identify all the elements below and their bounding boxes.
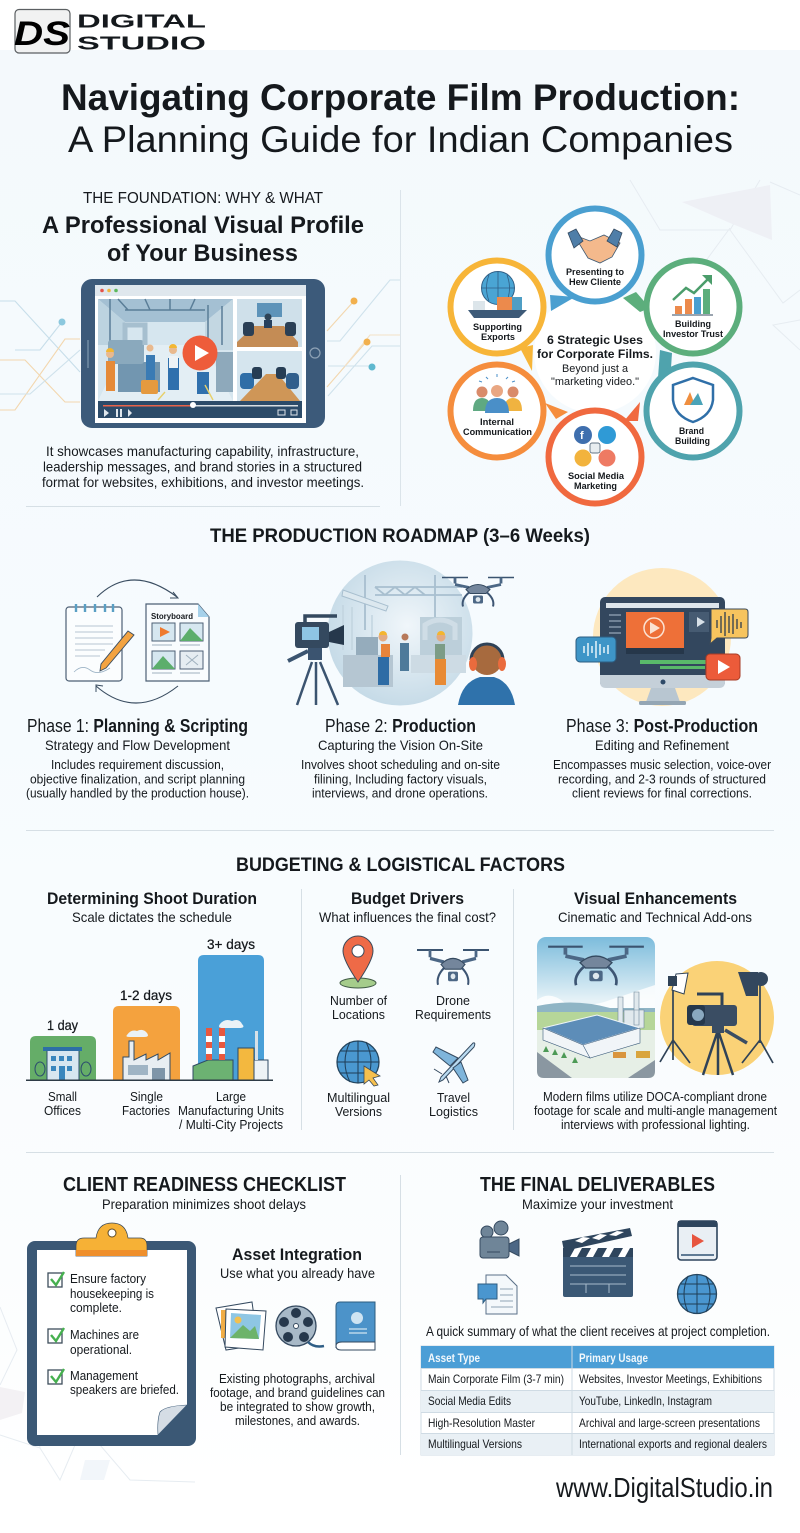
table row 4 — [428, 1437, 767, 1451]
foundation description: It showcases manufacturing capability, infrastructure, — [46, 443, 359, 459]
checklist heading — [63, 1174, 346, 1212]
check item 2 — [48, 1328, 139, 1357]
table row 3 — [428, 1416, 760, 1430]
bar labels — [44, 1090, 284, 1132]
table row 3: Archival and large-screen presentations — [579, 1416, 760, 1430]
icon: video camera — [480, 1221, 519, 1258]
visual enhancements heading: Cinematic and Technical Add-ons — [558, 909, 752, 925]
title: A Planning Guide for Indian Companies — [68, 119, 733, 160]
deliverables heading: THE FINAL DELIVERABLES — [480, 1174, 715, 1196]
shoot duration heading — [47, 889, 257, 925]
phase 2 text: Phase 2: Production — [325, 716, 476, 736]
icon: notebook and storyboard: Storyboard — [151, 612, 193, 621]
person with headset — [458, 644, 515, 705]
icon: production scene — [288, 560, 515, 706]
asset integration: Asset Integration — [232, 1245, 362, 1264]
panel: shoot duration — [26, 889, 284, 1132]
use: presenting to new clients — [548, 208, 642, 302]
use: supporting exports: Supporting — [473, 322, 522, 332]
visual enhancements heading — [558, 889, 752, 925]
icon: notebook and storyboard — [66, 580, 209, 703]
illustration: aerial drone over factory — [537, 937, 655, 1078]
budget drivers heading: Budget Drivers — [351, 889, 464, 908]
asset integration: be integrated to show growth, — [220, 1400, 375, 1414]
circuit lines left of tablet — [0, 301, 80, 410]
checklist heading: Preparation minimizes shoot delays — [102, 1196, 306, 1212]
bar labels: Manufacturing Units — [178, 1104, 284, 1118]
table header: Asset Type — [428, 1351, 480, 1365]
table header: Primary Usage — [579, 1351, 648, 1365]
table header — [428, 1351, 648, 1365]
check item 1 — [48, 1272, 154, 1315]
phase 3 text: client reviews for final corrections. — [572, 786, 752, 800]
table row 2: YouTube, LinkedIn, Instagram — [579, 1394, 712, 1408]
icon: clipboard — [27, 1223, 196, 1446]
table row 1: Main Corporate Film (3-7 min) — [428, 1372, 564, 1386]
panel: visual enhancements — [534, 889, 777, 1132]
use: supporting exports: Exports — [481, 332, 515, 342]
phase 1 text: objective finalization, and script planning — [30, 772, 245, 786]
foundation heading: A Professional Visual Profile — [42, 212, 364, 239]
use: brand building — [646, 364, 740, 458]
use: social media marketing: f — [580, 430, 584, 442]
centre text circle: 6 Strategic Uses — [547, 333, 643, 347]
phase 3 text: Phase 3: Post-Production — [566, 716, 758, 736]
deliverables heading: Maximize your investment — [522, 1196, 673, 1212]
asset integration: Existing photographs, archival — [219, 1372, 375, 1386]
budget drivers heading: What influences the final cost? — [319, 909, 496, 925]
foundation description: format for websites, exhibitions, and investor meetings. — [42, 474, 364, 490]
phase 1 text: Strategy and Flow Development — [45, 737, 230, 753]
panel: phase 1 — [26, 580, 249, 800]
check item 2: Machines are — [70, 1328, 139, 1342]
phase 2 text: Capturing the Vision On-Site — [318, 737, 483, 753]
factory video scene — [98, 299, 233, 401]
visual enhancements description — [534, 1090, 777, 1132]
visual enhancements description: footage for scale and multi-angle management — [534, 1104, 777, 1118]
illustration: camera and lights — [660, 961, 774, 1075]
driver: multilingual — [327, 1041, 390, 1119]
icon: tablet with video — [81, 279, 325, 428]
phase 2 text — [301, 716, 500, 800]
bar labels: Small — [48, 1090, 77, 1104]
foundation description: leadership messages, and brand stories in a structured — [43, 458, 362, 474]
panel: foundation — [0, 190, 400, 490]
visual enhancements heading: Visual Enhancements — [574, 889, 737, 908]
use: building investor trust — [646, 260, 740, 354]
phase 1 text: (usually handled by the production house). — [26, 786, 249, 800]
meeting room top — [237, 299, 302, 347]
asset integration: milestones, and awards. — [235, 1414, 360, 1428]
icon: video player — [678, 1221, 717, 1260]
foundation heading — [42, 190, 364, 267]
driver: travel: Logistics — [429, 1105, 478, 1119]
foundation description — [42, 443, 364, 490]
phase 2 text: filining, Including factory visuals, — [314, 772, 487, 786]
panel: phase 3 — [553, 568, 771, 800]
budget drivers heading — [319, 889, 496, 925]
bar chart: days by scale: 1-2 days — [120, 987, 172, 1003]
table row 4: International exports and regional dealers — [579, 1437, 767, 1451]
bar labels: Large — [216, 1090, 246, 1104]
check item 1: Ensure factory — [70, 1272, 147, 1286]
checklist heading: CLIENT READINESS CHECKLIST — [63, 1174, 346, 1196]
video controls — [98, 401, 302, 418]
circuit lines right of tablet — [327, 280, 400, 396]
use: supporting exports — [450, 260, 544, 354]
check item 3: Management — [70, 1369, 138, 1383]
drone — [442, 578, 514, 606]
driver: locations: Number of — [330, 994, 388, 1008]
visual enhancements description: interviews with professional lighting. — [561, 1118, 750, 1132]
bar labels: Factories — [122, 1104, 170, 1118]
bar labels: / Multi-City Projects — [179, 1118, 283, 1132]
driver: multilingual: Multilingual — [327, 1091, 390, 1105]
driver: travel — [429, 1043, 478, 1119]
use: social media marketing — [548, 410, 642, 504]
table row 4: Multilingual Versions — [428, 1437, 522, 1451]
driver: drone: Requirements — [415, 1008, 491, 1022]
bar labels: Offices — [44, 1104, 81, 1118]
phase 3 text: recording, and 2-3 rounds of structured — [558, 772, 766, 786]
phase 1 text: Includes requirement discussion, — [51, 758, 224, 772]
shoot duration heading: Scale dictates the schedule — [72, 909, 232, 925]
bar chart: days by scale: 3+ days — [207, 936, 255, 952]
foundation heading: THE FOUNDATION: WHY & WHAT — [83, 190, 323, 207]
centre text circle — [520, 291, 672, 421]
deliverables table — [421, 1346, 774, 1455]
deliverables heading — [480, 1174, 715, 1212]
driver: drone — [415, 950, 491, 1022]
use: building investor trust: Investor Trust — [663, 329, 723, 339]
icon: film reel — [276, 1306, 324, 1346]
use: internal communication: Communication — [463, 427, 532, 437]
phase 3 text — [553, 716, 771, 800]
use: building investor trust: Building — [675, 319, 711, 329]
panel: client readiness checklist — [27, 1174, 385, 1446]
asset integration: Use what you already have — [220, 1265, 375, 1281]
table row 2: Social Media Edits — [428, 1394, 511, 1408]
table row 3: High-Resolution Master — [428, 1416, 535, 1430]
film camera on tripod — [288, 616, 344, 705]
phase 3 text: Editing and Refinement — [595, 737, 729, 753]
icon: editing monitor — [576, 568, 748, 706]
table row 2 — [428, 1394, 712, 1408]
use: social media marketing: Social Media — [568, 471, 625, 481]
panel: budget drivers — [319, 889, 496, 1119]
driver: travel: Travel — [437, 1091, 470, 1105]
icon: brand guidelines book — [336, 1302, 375, 1350]
use: presenting to new clients: Hew Cliente — [569, 277, 621, 287]
driver: drone: Drone — [436, 994, 470, 1008]
icon: photographs — [216, 1302, 266, 1350]
check item 1: housekeeping is — [70, 1287, 154, 1301]
icon: globe — [678, 1274, 716, 1314]
logo: DS — [14, 15, 70, 53]
asset integration — [210, 1245, 385, 1428]
centre text circle: Beyond just a — [562, 363, 629, 375]
use: social media marketing: Marketing — [574, 481, 617, 491]
centre text circle: "marketing video." — [551, 376, 639, 388]
bar labels: Single — [130, 1090, 163, 1104]
title — [61, 77, 740, 160]
use: internal communication — [450, 364, 544, 458]
check item 3 — [48, 1369, 179, 1397]
bar chart: days by scale: 1 day — [47, 1017, 78, 1033]
heading: production roadmap: THE PRODUCTION ROADMAP (3–6 Weeks) — [210, 526, 590, 547]
driver: locations — [330, 936, 388, 1022]
table row 1: Websites, Investor Meetings, Exhibitions — [579, 1372, 762, 1386]
heading: budgeting: BUDGETING & LOGISTICAL FACTORS — [236, 855, 565, 876]
use: brand building: Brand — [679, 426, 704, 436]
meeting room bottom — [237, 351, 302, 401]
asset integration: footage, and brand guidelines can — [210, 1386, 385, 1400]
table row 1 — [428, 1372, 762, 1386]
icon: clapperboard — [562, 1228, 633, 1297]
icon: document with chat — [478, 1275, 517, 1314]
logo: DIGITAL — [77, 12, 206, 32]
panel: final deliverables — [421, 1174, 774, 1455]
phase 1 text: Phase 1: Planning & Scripting — [27, 716, 248, 736]
visual enhancements description: Modern films utilize DOCA-compliant drone — [543, 1090, 767, 1104]
logo — [14, 10, 206, 54]
bar chart: days by scale — [26, 936, 273, 1081]
phase 3 text: Encompasses music selection, voice-over — [553, 758, 771, 772]
use: internal communication: Internal — [480, 417, 514, 427]
phase 2 text: Involves shoot scheduling and on-site — [301, 758, 500, 772]
phase 1 text — [26, 716, 249, 800]
title: Navigating Corporate Film Production: — [61, 77, 740, 118]
shoot duration heading: Determining Shoot Duration — [47, 889, 257, 908]
use: presenting to new clients: Presenting to — [566, 267, 624, 277]
check item 2: operational. — [70, 1343, 132, 1357]
check item 3: speakers are briefed. — [70, 1383, 179, 1397]
panel: 6 strategic uses — [450, 208, 740, 504]
use: brand building: Building — [675, 436, 710, 446]
phase 2 text: interviews, and drone operations. — [312, 786, 488, 800]
driver: locations: Locations — [332, 1008, 385, 1022]
icon: play button — [182, 336, 218, 370]
centre text circle: for Corporate Films. — [537, 347, 653, 361]
driver: multilingual: Versions — [335, 1105, 382, 1119]
foundation heading: of Your Business — [107, 240, 298, 267]
logo: STUDIO — [77, 34, 206, 54]
panel: phase 2 — [288, 560, 515, 800]
check item 1: complete. — [70, 1301, 122, 1315]
